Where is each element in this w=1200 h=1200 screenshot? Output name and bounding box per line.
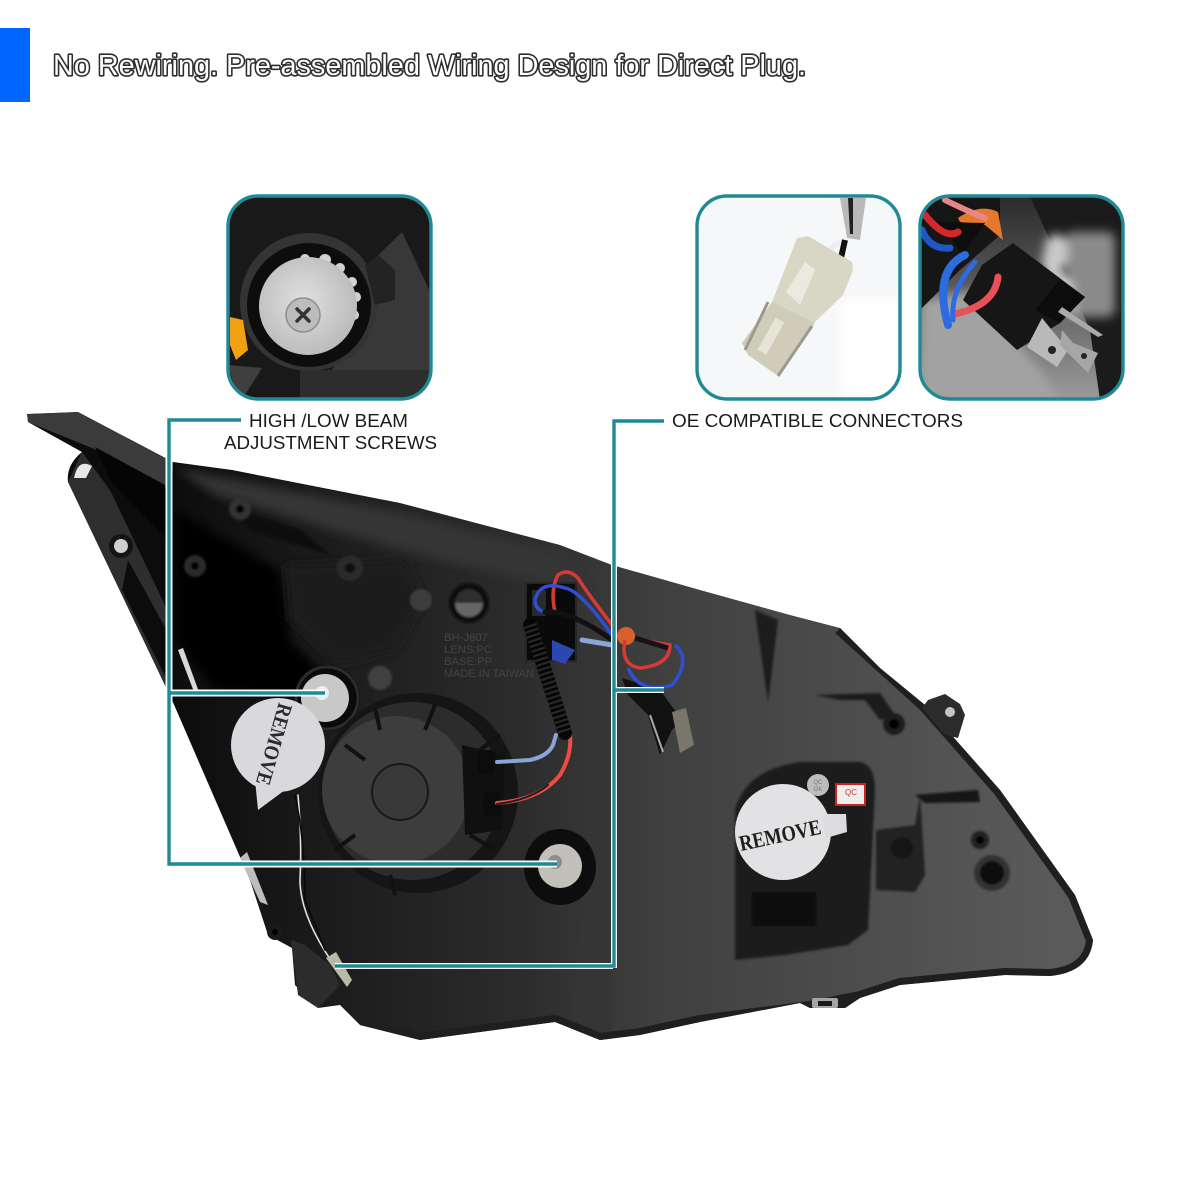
outer rim [360, 628, 1093, 1040]
moulded part text: MADE IN TAIWAN [444, 668, 534, 680]
upper housing shadows [177, 467, 534, 700]
label: high/low beam adjustment screws: HIGH /LOW BEAM [249, 410, 408, 431]
QC stickers: QC [814, 780, 823, 786]
label: high/low beam adjustment screws [224, 410, 437, 453]
QC stickers: QC [845, 788, 857, 797]
panel: H4 relay connector photo [920, 196, 1124, 400]
right side moulded panel [735, 610, 1010, 960]
bottom left tab [267, 924, 340, 1008]
upper housing bosses [184, 498, 489, 690]
QC stickers: OK [814, 787, 822, 793]
QC stickers [807, 774, 865, 805]
callout lines: connectors [335, 421, 664, 968]
right mounting tab [922, 694, 965, 738]
lower adjustment screw [524, 829, 596, 905]
title: No Rewiring. Pre-assembled Wiring Design for Direct Plug. [53, 50, 806, 82]
panel: T10 connector photo [697, 196, 901, 400]
small bulb socket on pigtail [326, 952, 352, 987]
left mounting bracket [27, 412, 173, 700]
left REMOVE sticker [231, 698, 325, 810]
moulded part text: BH-J607 [444, 632, 488, 644]
right REMOVE sticker: REMOVE [737, 814, 823, 856]
right REMOVE sticker [735, 784, 847, 880]
left lens highlights [178, 648, 199, 692]
wiring harness [295, 572, 612, 962]
panel: adjustment screw photo [228, 196, 432, 400]
moulded part text [445, 634, 533, 677]
label: OE compatible connectors: OE COMPATIBLE CONNECTORS [672, 410, 963, 431]
right H4 connector [617, 627, 694, 755]
moulded part text: LENS:PC [444, 644, 492, 656]
label: high/low beam adjustment screws: ADJUSTMENT SCREWS [224, 432, 437, 453]
upper adjustment screw [294, 665, 360, 731]
callout lines: adjustment screws [169, 420, 557, 864]
left REMOVE sticker: REMOVE [251, 701, 297, 788]
vertical centre rib [572, 1028, 612, 1040]
accessory socket opening [526, 583, 576, 664]
bulb dust cap [318, 693, 518, 895]
bottom clip [812, 998, 838, 1008]
blue accent bar [0, 28, 30, 102]
headlight housing rear view [27, 196, 1124, 1040]
moulded part text: BASE:PP [444, 656, 492, 668]
